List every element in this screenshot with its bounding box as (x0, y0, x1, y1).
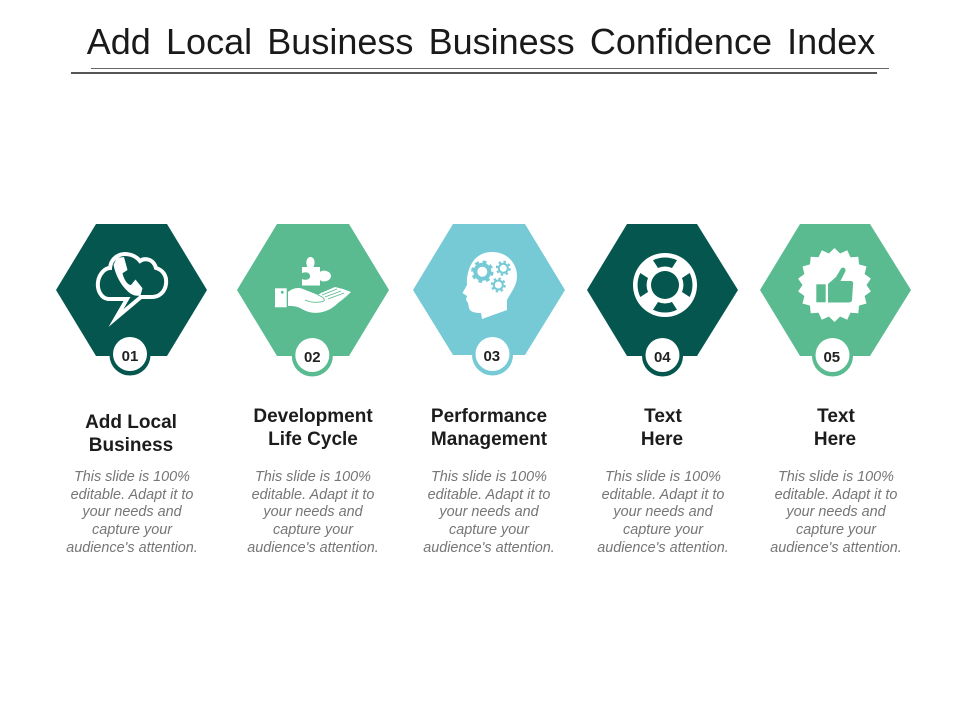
hexagon 05 (760, 224, 911, 356)
body text 02: This slide is 100% (255, 469, 371, 485)
body text 04: This slide is 100% (605, 469, 721, 485)
heading 02: Life Cycle (268, 429, 358, 450)
number badge 04 (642, 336, 683, 376)
heading 04: Here (641, 429, 683, 450)
body text 03: capture your (449, 522, 530, 538)
panel: step 04 (587, 224, 738, 556)
body text 05: editable. Adapt it to (775, 487, 897, 503)
icon: hand holding puzzle piece (275, 257, 351, 313)
body text 02: audience's attention. (247, 540, 379, 556)
icon: thumbs up badge (798, 248, 871, 322)
body text 01: editable. Adapt it to (71, 487, 193, 503)
number badge 05 (812, 336, 853, 376)
body text 04: your needs and (612, 504, 714, 520)
body text 03: audience's attention. (423, 540, 555, 556)
number badge 02 (292, 336, 333, 376)
heading 01: Add Local (85, 412, 177, 433)
heading 05: Here (814, 429, 856, 450)
number badge 05: 05 (823, 349, 840, 366)
icon: cloud with phone (98, 254, 166, 318)
body text 02: editable. Adapt it to (252, 487, 374, 503)
number badge 01 (110, 334, 150, 376)
body text 01: audience's attention. (66, 540, 198, 556)
heading 02: Development (253, 406, 373, 427)
body text 05: capture your (796, 522, 877, 538)
panel: step 05 (760, 224, 911, 556)
body text 03: your needs and (438, 504, 540, 520)
heading 04: Text (644, 406, 682, 427)
number badge 03: 03 (483, 348, 500, 365)
body text 05: audience's attention. (770, 540, 902, 556)
body text 01: capture your (92, 522, 173, 538)
body text 01: your needs and (81, 504, 183, 520)
number badge 01: 01 (122, 348, 138, 365)
panel: step 02 (237, 224, 389, 556)
body text 01: This slide is 100% (74, 469, 190, 485)
hexagon 02 (237, 224, 389, 356)
body text 02: your needs and (262, 504, 364, 520)
number badge 04: 04 (654, 349, 671, 366)
body text 05: your needs and (785, 504, 887, 520)
title: Add Local Business Business Confidence Index (87, 21, 875, 62)
number badge 02: 02 (304, 349, 321, 366)
heading 01: Business (89, 435, 173, 456)
body text 04: audience's attention. (597, 540, 729, 556)
title underline (71, 68, 889, 74)
heading 03: Performance (431, 406, 547, 427)
body text 05: This slide is 100% (778, 469, 894, 485)
icon: head with gears (462, 252, 517, 319)
panel: step 03 (413, 224, 565, 556)
heading 05: Text (817, 406, 855, 427)
panel: step 01 (56, 224, 207, 556)
hexagon 03 (413, 224, 565, 355)
hexagon 04 (587, 224, 738, 356)
body text 03: editable. Adapt it to (428, 487, 550, 503)
hexagon 01 (56, 224, 207, 356)
icon: lifebuoy (633, 253, 697, 317)
heading 03: Management (431, 429, 548, 450)
body text 04: capture your (623, 522, 704, 538)
body text 03: This slide is 100% (431, 469, 547, 485)
body text 02: capture your (273, 522, 354, 538)
number badge 03 (472, 334, 513, 376)
body text 04: editable. Adapt it to (602, 487, 724, 503)
